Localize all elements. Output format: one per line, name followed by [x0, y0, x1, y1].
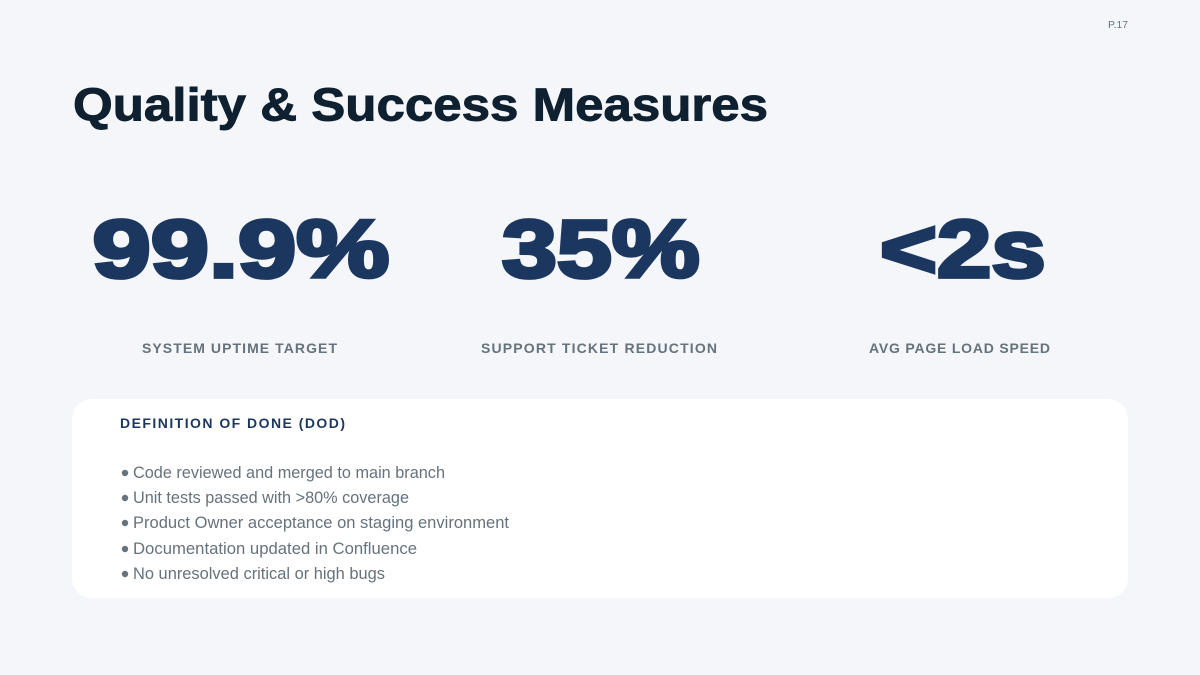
metric value: 99.9%: 99.9% — [92, 203, 389, 294]
panel heading: DEFINITION OF DONE (DOD) — [120, 415, 345, 431]
title: Quality & Success Measures — [73, 80, 768, 131]
metric: system uptime — [92, 203, 389, 356]
panel: definition of done — [72, 399, 1128, 598]
checklist: Unit tests passed with >80% coverage — [133, 488, 409, 507]
checklist — [122, 463, 509, 583]
metric label: system uptime target: SYSTEM UPTIME TARGET — [142, 340, 337, 356]
metric label: avg page load speed: AVG PAGE LOAD SPEED — [869, 340, 1050, 356]
metric value: 35%: 35% — [502, 204, 700, 295]
metric: page load — [869, 203, 1050, 356]
checklist: Product Owner acceptance on staging environment — [133, 513, 509, 532]
metric: support tickets — [481, 204, 717, 356]
checklist: Code reviewed and merged to main branch — [133, 463, 445, 482]
metric value: under 2s: <2s — [880, 203, 1046, 295]
metric label: support ticket reduction: SUPPORT TICKET REDUCTION — [481, 340, 717, 356]
checklist: Documentation updated in Confluence — [133, 539, 417, 558]
checklist: No unresolved critical or high bugs — [133, 564, 385, 583]
page number: P.17 — [1108, 19, 1128, 31]
